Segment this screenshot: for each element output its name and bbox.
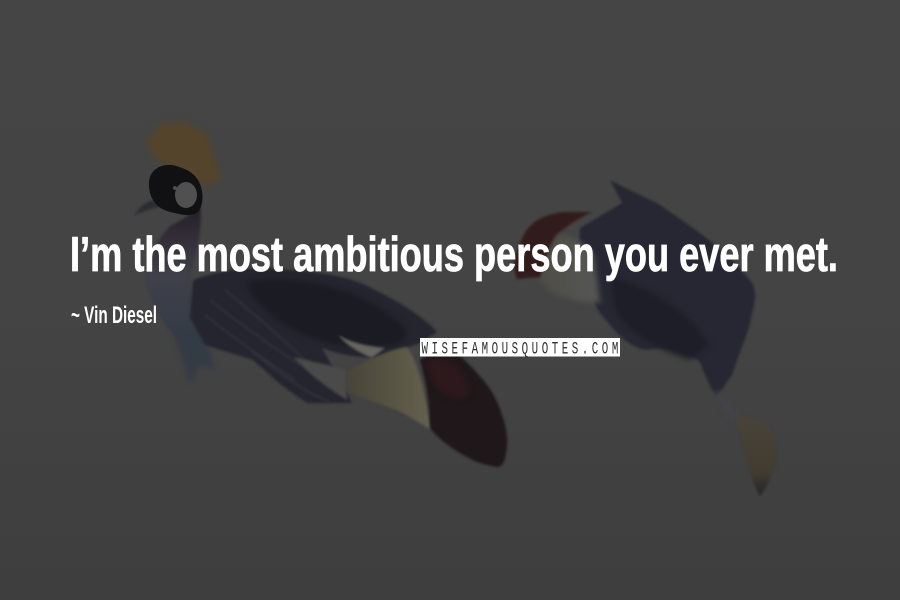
illustration: crowned crane, left [134, 122, 507, 467]
red neck [514, 212, 592, 279]
lower wing feathers [205, 290, 330, 402]
pale wing patch [293, 357, 347, 400]
attribution: ~ Vin Diesel [71, 302, 157, 329]
body [580, 180, 755, 397]
pale wing feather [338, 335, 385, 358]
darker wing [245, 279, 406, 348]
maroon highlight [424, 359, 469, 398]
eye [173, 186, 177, 190]
watermark badge [420, 338, 620, 360]
cheek [175, 182, 197, 208]
cream feathers [346, 347, 431, 430]
leg shadow [712, 392, 745, 425]
illustration: crowned crane, right [514, 180, 777, 496]
cream neck [540, 236, 600, 303]
crest [147, 122, 221, 185]
badge background [420, 338, 620, 356]
neck [146, 205, 205, 345]
neck plumes [172, 330, 215, 385]
tuft [737, 417, 777, 496]
badge text: WISEFAMOUSQUOTES.COM [422, 340, 618, 360]
head [149, 165, 202, 215]
body [190, 268, 437, 403]
maroon tail [420, 352, 507, 467]
beak [134, 198, 170, 216]
shaded breast feathers [610, 275, 710, 360]
